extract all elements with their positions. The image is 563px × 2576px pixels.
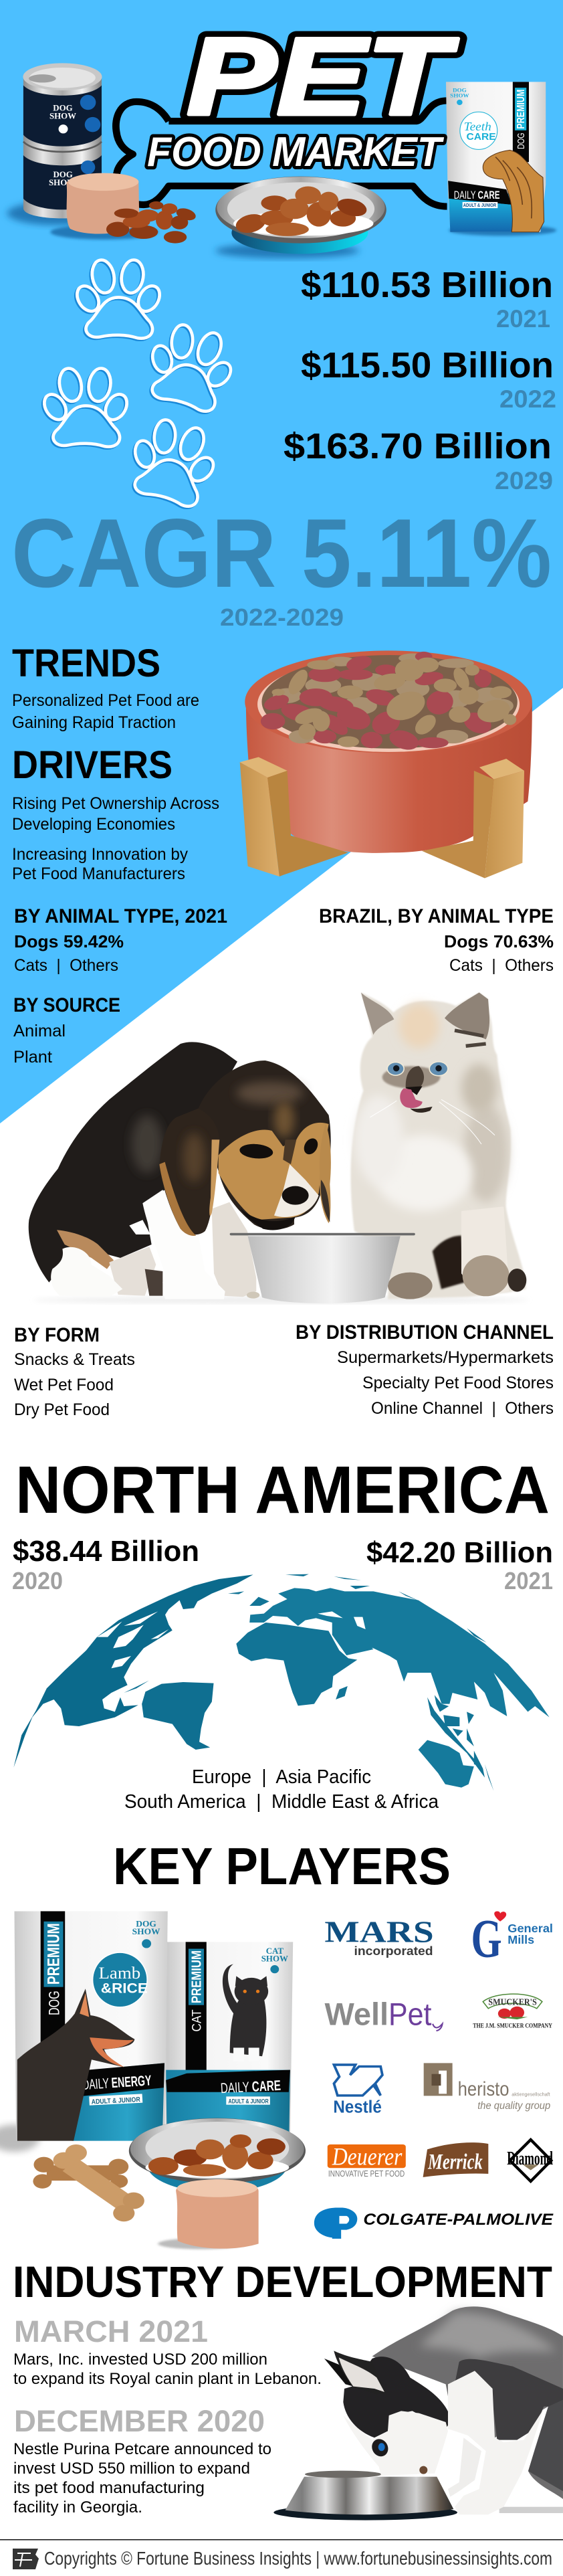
heading: trends: TRENDS (12, 642, 160, 685)
heading: December 2020: DECEMBER 2020 (14, 2404, 265, 2438)
text: Mars investment line one: Mars, Inc. invested USD 200 million (13, 2351, 267, 2369)
icon: dog premium pouch: SHOW (132, 1926, 160, 1936)
icon: cat premium pouch: CAT (266, 1946, 284, 1956)
husky ears (324, 2359, 353, 2387)
icon: meat chunks (106, 201, 197, 244)
puppy right ear (320, 1124, 331, 1223)
logo: Merrick (423, 2142, 488, 2177)
logo: heristo: heristo (458, 2079, 509, 2100)
husky chest and legs (448, 2437, 481, 2497)
icon: plate of food (129, 2118, 306, 2193)
CAGR period: 2022-2029 (220, 604, 344, 631)
icon: stacked dog food cans (7, 63, 108, 225)
title: PET: PET (187, 15, 459, 138)
husky food bowl (273, 2471, 457, 2520)
heading: drivers: DRIVERS (12, 743, 173, 787)
logo: Colgate-Palmolive (314, 2207, 554, 2239)
stat: 2021 year: 2021 (496, 305, 550, 333)
stat: 2021 value: $110.53 Billion (301, 265, 553, 305)
stat: 2022 value: $115.50 Billion (301, 345, 554, 385)
illustration: dog and cat food pouches (0, 1911, 293, 2152)
logo: WellPet: Pet (388, 1997, 432, 2032)
icon: metal bowl (230, 1233, 415, 1303)
logo: heristo (424, 2063, 550, 2112)
logo: heristo: the quality group (477, 2101, 550, 2112)
husky face (343, 2411, 448, 2476)
logo: Smucker's: SMUCKER'S (488, 1997, 537, 2008)
Hudson Bay, lakes and Arctic gaps (97, 1611, 168, 1668)
icon: dog premium pouch: PREMIUM (45, 1923, 64, 1985)
logo: Mars (324, 1915, 434, 1958)
logo: General Mills: General (508, 1922, 553, 1935)
Eurasia (249, 1588, 550, 1718)
footer: logo and copyright (13, 2548, 552, 2569)
icon: dog premium pouch: CARE (467, 131, 496, 143)
illustration: puppy and kitten with metal bowl (29, 992, 528, 1303)
logo: Smucker's (473, 1994, 552, 2029)
industry development entries (13, 2314, 322, 2516)
stat: North America 2020 value: $38.44 Billion (13, 1535, 199, 1568)
text: Nestle line one: Nestle Purina Petcare announced to (13, 2440, 271, 2458)
company logos row two (314, 2140, 554, 2239)
text: Nestle line three: its pet food manufacturing (13, 2479, 205, 2497)
text: online and others: Online Channel | Others (371, 1399, 554, 1418)
logo: Deuerer: INNOVATIVE PET FOOD (328, 2170, 405, 2179)
UK and Arctic islands (249, 1574, 487, 1643)
text: wet pet food: Wet Pet Food (14, 1376, 114, 1394)
text: Mars investment line two: to expand its Royal canin plant in Lebanon. (13, 2370, 322, 2388)
icon: dog premium pouch (14, 1911, 168, 2141)
title artwork: bone, cans, food and pouch (7, 63, 556, 258)
puppy left ear (159, 1109, 219, 1234)
icon: dog premium pouch: DAILY ENERGY (82, 2072, 152, 2093)
text: driver one line two: Developing Economies (12, 815, 175, 834)
icon: dog premium pouch: DOG (516, 132, 527, 149)
icon: plate of pet food (215, 177, 386, 258)
icon: terracotta bowl of kibble on wooden stand (240, 650, 532, 879)
stat: North America 2021 value: $42.20 Billion (366, 1536, 553, 1569)
heading: by source: BY SOURCE (13, 994, 120, 1016)
Black Sea and Caspian (318, 1611, 366, 1629)
icon: cat premium pouch: PREMIUM (189, 1950, 205, 2003)
stat: year 2021: 2021 (504, 1567, 553, 1594)
icon: dog premium pouch: ADULT & JUNIOR (463, 202, 496, 208)
icon: shar-pei dog (483, 150, 544, 232)
title: PET: PET (187, 15, 459, 138)
logo: Nestle: Nestlé (333, 2097, 382, 2116)
icon: meat patty (50, 173, 158, 240)
icon: doberman (17, 1989, 134, 2141)
stat: Brazil dogs share: Dogs 70.63% (444, 931, 554, 951)
logo: heristo: aktiengesellschaft (512, 2092, 550, 2097)
icon: dog premium pouch: &RICE (101, 1980, 148, 1996)
icon: dog premium pouch: DOG (45, 1991, 63, 2015)
icon: rear dog bone (33, 2157, 128, 2189)
logo: WellPet: Well (324, 1997, 388, 2032)
text: driver two: Increasing Innovation by (12, 845, 188, 864)
icon: dog premium pouch: SHOW (450, 92, 469, 98)
text: South America and Middle East and Africa: South America | Middle East & Africa (124, 1791, 439, 1813)
illustration: husky eating from bowl (273, 2306, 563, 2520)
logo: Merrick: Merrick (427, 2150, 483, 2174)
icon: right wooden leg (422, 759, 524, 879)
text: animal: Animal (13, 1022, 66, 1040)
logo: Mars: incorporated (354, 1944, 433, 1958)
icon: left wooden leg (240, 757, 348, 877)
animal type text blocks (13, 905, 554, 1067)
stat: 2029 value: $163.70 Billion (284, 426, 552, 466)
icon: dog premium pouch: DAILY CARE (454, 188, 500, 201)
text: dry pet food: Dry Pet Food (14, 1400, 110, 1419)
logo: Deuerer (328, 2144, 406, 2179)
text: driver two line two: Pet Food Manufacturers (12, 864, 185, 883)
text: trend item line two: Gaining Rapid Traction (12, 713, 176, 732)
segmentation text: form and distribution channel (14, 1321, 554, 1419)
Southeast Asian islands (427, 1695, 493, 1791)
icon: cat premium pouch: DAILY CARE (220, 2077, 282, 2096)
stat: year 2020: 2020 (12, 1567, 63, 1594)
husky body fur (372, 2306, 563, 2499)
food: bones, plate and patty (33, 2118, 306, 2249)
icons: four paw prints (39, 258, 243, 513)
logo: General Mills: G (471, 1908, 502, 1969)
icon: dog premium pouch: ADULT & JUNIOR (92, 2096, 140, 2106)
text: trend item: Personalized Pet Food are (12, 691, 199, 710)
icon: puppy (29, 1042, 331, 1299)
title: FOOD MARKET: FOOD MARKET (147, 129, 445, 175)
logo: General Mills (471, 1908, 553, 1969)
icon: black cat (223, 1964, 268, 2061)
icon: dog premium pouch: Lamb (99, 1964, 140, 1983)
Madagascar (336, 1686, 348, 1699)
icon: cat premium pouch: CAT (189, 2009, 204, 2031)
icon: front dog bone (53, 2144, 144, 2221)
icon: cat premium pouch: ADULT & JUNIOR (229, 2098, 269, 2105)
Iceland and Caribbean (124, 1591, 244, 1693)
text: Brazil cats and others: Cats | Others (449, 956, 554, 975)
text: supermarkets: Supermarkets/Hypermarkets (337, 1348, 554, 1367)
icon: stacked dog food cans: DOG (53, 104, 73, 113)
text: Nestle line two: invest USD 550 million to expand (13, 2460, 250, 2478)
logo: Fortune Business Insights (13, 2549, 39, 2569)
North America (13, 1574, 253, 1768)
icon: meat patty (158, 2179, 259, 2249)
icon: dog premium pouch: DOG (136, 1919, 156, 1928)
stat: 2029 year: 2029 (495, 467, 553, 494)
icon: dog premium pouch: PREMIUM (516, 90, 527, 129)
text: snacks and treats: Snacks & Treats (14, 1350, 135, 1369)
icon: stacked dog food cans: SHOW (49, 178, 76, 187)
puppy head (199, 1061, 331, 1229)
other regions list (124, 1766, 439, 1813)
stat: 2022 year: 2022 (499, 385, 556, 413)
company logos (324, 1908, 553, 2116)
Africa (236, 1623, 357, 1706)
world map (13, 1574, 550, 1791)
Australia (419, 1740, 474, 1788)
logo: Deuerer: Deuerer (332, 2144, 403, 2171)
heading: key players: KEY PLAYERS (113, 1837, 451, 1896)
text: Europe and Asia Pacific: Europe | Asia Pacific (192, 1766, 371, 1788)
heading: March 2021: MARCH 2021 (14, 2314, 208, 2349)
logo: General Mills: Mills (508, 1933, 534, 1946)
text: Nestle line four: facility in Georgia. (13, 2498, 142, 2516)
icon: cat premium pouch (166, 1942, 293, 2141)
icon: dog premium pouch (446, 82, 556, 236)
stat: dogs share: Dogs 59.42% (14, 931, 124, 951)
heading: by form: BY FORM (14, 1324, 100, 1346)
logo: Mars: MARS (324, 1915, 434, 1949)
logo: WellPet (324, 1997, 443, 2032)
icon: bone outline (116, 100, 447, 207)
South America (142, 1682, 214, 1750)
text: plant: Plant (13, 1048, 52, 1067)
text: specialty stores: Specialty Pet Food Stores (362, 1374, 554, 1392)
icon: stacked dog food cans: DOG (53, 170, 73, 179)
icon: dog premium pouch: DOG (453, 87, 467, 94)
title: FOOD MARKET: FOOD MARKET (147, 129, 445, 175)
icon: stacked dog food cans: SHOW (49, 112, 76, 120)
logo: Diamond (507, 2140, 553, 2181)
heading: by animal type: BY ANIMAL TYPE, 2021 (14, 905, 227, 927)
text: driver one: Rising Pet Ownership Across (12, 794, 219, 813)
text: cats and others: Cats | Others (14, 956, 118, 975)
market size figures (284, 265, 556, 494)
icon: kitten (350, 992, 526, 1299)
trends and drivers text (12, 642, 219, 883)
logo: Nestle (333, 2065, 382, 2116)
icon: cat premium pouch: SHOW (261, 1954, 288, 1963)
icon: dog premium pouch: Teeth (464, 120, 491, 134)
